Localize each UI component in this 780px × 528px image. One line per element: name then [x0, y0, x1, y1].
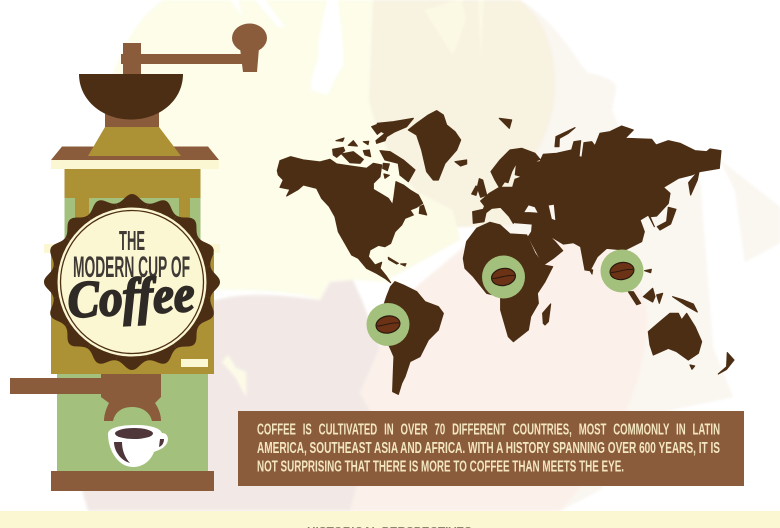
seal inner rings	[58, 208, 206, 356]
title badge: THE	[119, 225, 145, 256]
coffee grinder illustration	[10, 24, 267, 491]
base	[51, 471, 214, 491]
band: next section	[0, 511, 780, 528]
bean hopper bowl	[79, 74, 183, 120]
intro text panel	[238, 411, 744, 486]
drawer label	[181, 359, 208, 367]
Islands of Asia, Oceania, Europe	[472, 118, 734, 374]
Eastern hemisphere	[463, 118, 734, 374]
handle with knob	[121, 24, 267, 76]
title: Coffee: Coffee	[66, 266, 196, 329]
cream band	[44, 244, 220, 253]
marker: coffee region Africa	[482, 256, 525, 298]
drawer pull handle	[10, 374, 161, 421]
Eurasia	[473, 126, 721, 271]
title badge	[44, 194, 220, 370]
North America	[277, 157, 423, 283]
marker: coffee region Latin America	[366, 303, 410, 346]
title badge: MODERN CUP OF	[73, 251, 190, 284]
Arctic islands	[333, 118, 467, 266]
South America	[380, 282, 443, 394]
marker: coffee region Southeast Asia	[600, 250, 644, 292]
Australia	[648, 313, 702, 360]
Americas	[277, 111, 467, 394]
scalloped seal	[44, 194, 220, 370]
upper body	[64, 169, 200, 248]
cream strip	[51, 160, 219, 169]
green compartment	[57, 374, 208, 471]
icon: coffee cup	[108, 425, 168, 467]
roof	[51, 146, 219, 160]
neck	[105, 112, 159, 128]
Africa	[463, 222, 553, 342]
funnel	[88, 127, 181, 156]
intro paragraph	[257, 422, 720, 476]
Greenland	[408, 111, 461, 180]
lower gold drawer	[51, 250, 214, 374]
world map	[277, 111, 734, 394]
